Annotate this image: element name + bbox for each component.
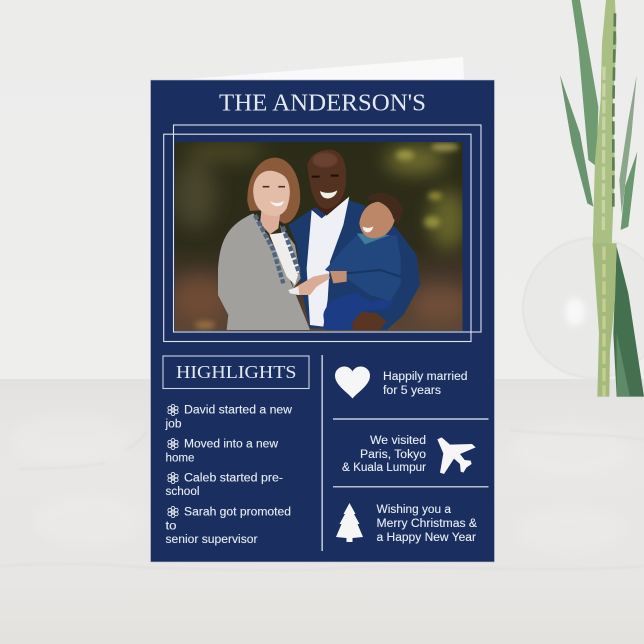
item: pre-school: school	[166, 486, 200, 498]
frame: upper right	[174, 125, 481, 332]
travel text: We visited	[370, 435, 426, 447]
item: new home: home	[166, 452, 194, 464]
column divider	[322, 355, 323, 551]
child collar	[357, 233, 390, 244]
highlights heading: HIGHLIGHTS	[176, 362, 296, 382]
woman hair	[247, 158, 300, 224]
title: THE ANDERSON'S	[219, 90, 426, 116]
man head	[307, 150, 346, 209]
married text: for 5 years	[383, 385, 441, 397]
woman top	[269, 232, 300, 285]
child jacket	[325, 234, 401, 301]
wishes text: Merry Christmas &	[376, 518, 477, 530]
woman cardigan	[218, 213, 310, 330]
necklace	[255, 215, 299, 283]
child hair	[368, 193, 403, 225]
vase	[523, 238, 644, 378]
background: wall	[0, 0, 644, 381]
man jacket	[288, 200, 420, 330]
woman neck	[260, 208, 280, 234]
wishes text: a Happy New Year	[376, 532, 476, 544]
background: marble counter	[0, 379, 644, 644]
divider: lower	[333, 486, 488, 487]
item: promotion: to	[166, 520, 176, 532]
child legs	[323, 293, 395, 330]
child head	[359, 202, 395, 238]
card front panel	[150, 80, 494, 562]
card back page	[190, 57, 464, 79]
item: new job: job	[164, 418, 182, 430]
section: married	[335, 366, 468, 398]
item: promotion: Sarah got promoted	[184, 506, 291, 518]
man shirt	[307, 197, 349, 327]
woman face	[253, 171, 290, 216]
plant	[560, 0, 644, 397]
wishes text	[376, 504, 477, 544]
wishes text: Wishing you a	[376, 504, 452, 516]
travel text: Paris, Tokyo	[360, 449, 426, 461]
icon: tree	[336, 503, 363, 542]
divider: upper	[333, 418, 488, 420]
section: travel	[342, 435, 476, 474]
married text: Happily married	[383, 371, 468, 383]
icon: heart	[335, 366, 370, 398]
item: pre-school	[166, 472, 283, 498]
item: new job	[164, 404, 293, 430]
travel text: & Kuala Lumpur	[342, 462, 426, 474]
family photo	[170, 142, 470, 331]
item: pre-school: Caleb started pre-	[184, 472, 283, 484]
highlights heading	[163, 356, 309, 388]
married text	[383, 371, 468, 397]
highlights list	[164, 404, 293, 546]
icon: plane	[437, 437, 476, 474]
item: new job: David started a new	[184, 404, 293, 416]
item: promotion: senior supervisor	[166, 534, 258, 546]
man neck	[317, 193, 345, 216]
item: new home: Moved into a new	[184, 438, 279, 450]
frame: lower left	[164, 134, 471, 342]
decorative frames	[164, 125, 481, 342]
section: wishes	[336, 503, 477, 544]
item: new home	[166, 438, 279, 464]
hands	[293, 273, 330, 295]
item: promotion	[166, 506, 291, 546]
travel text	[342, 435, 426, 474]
